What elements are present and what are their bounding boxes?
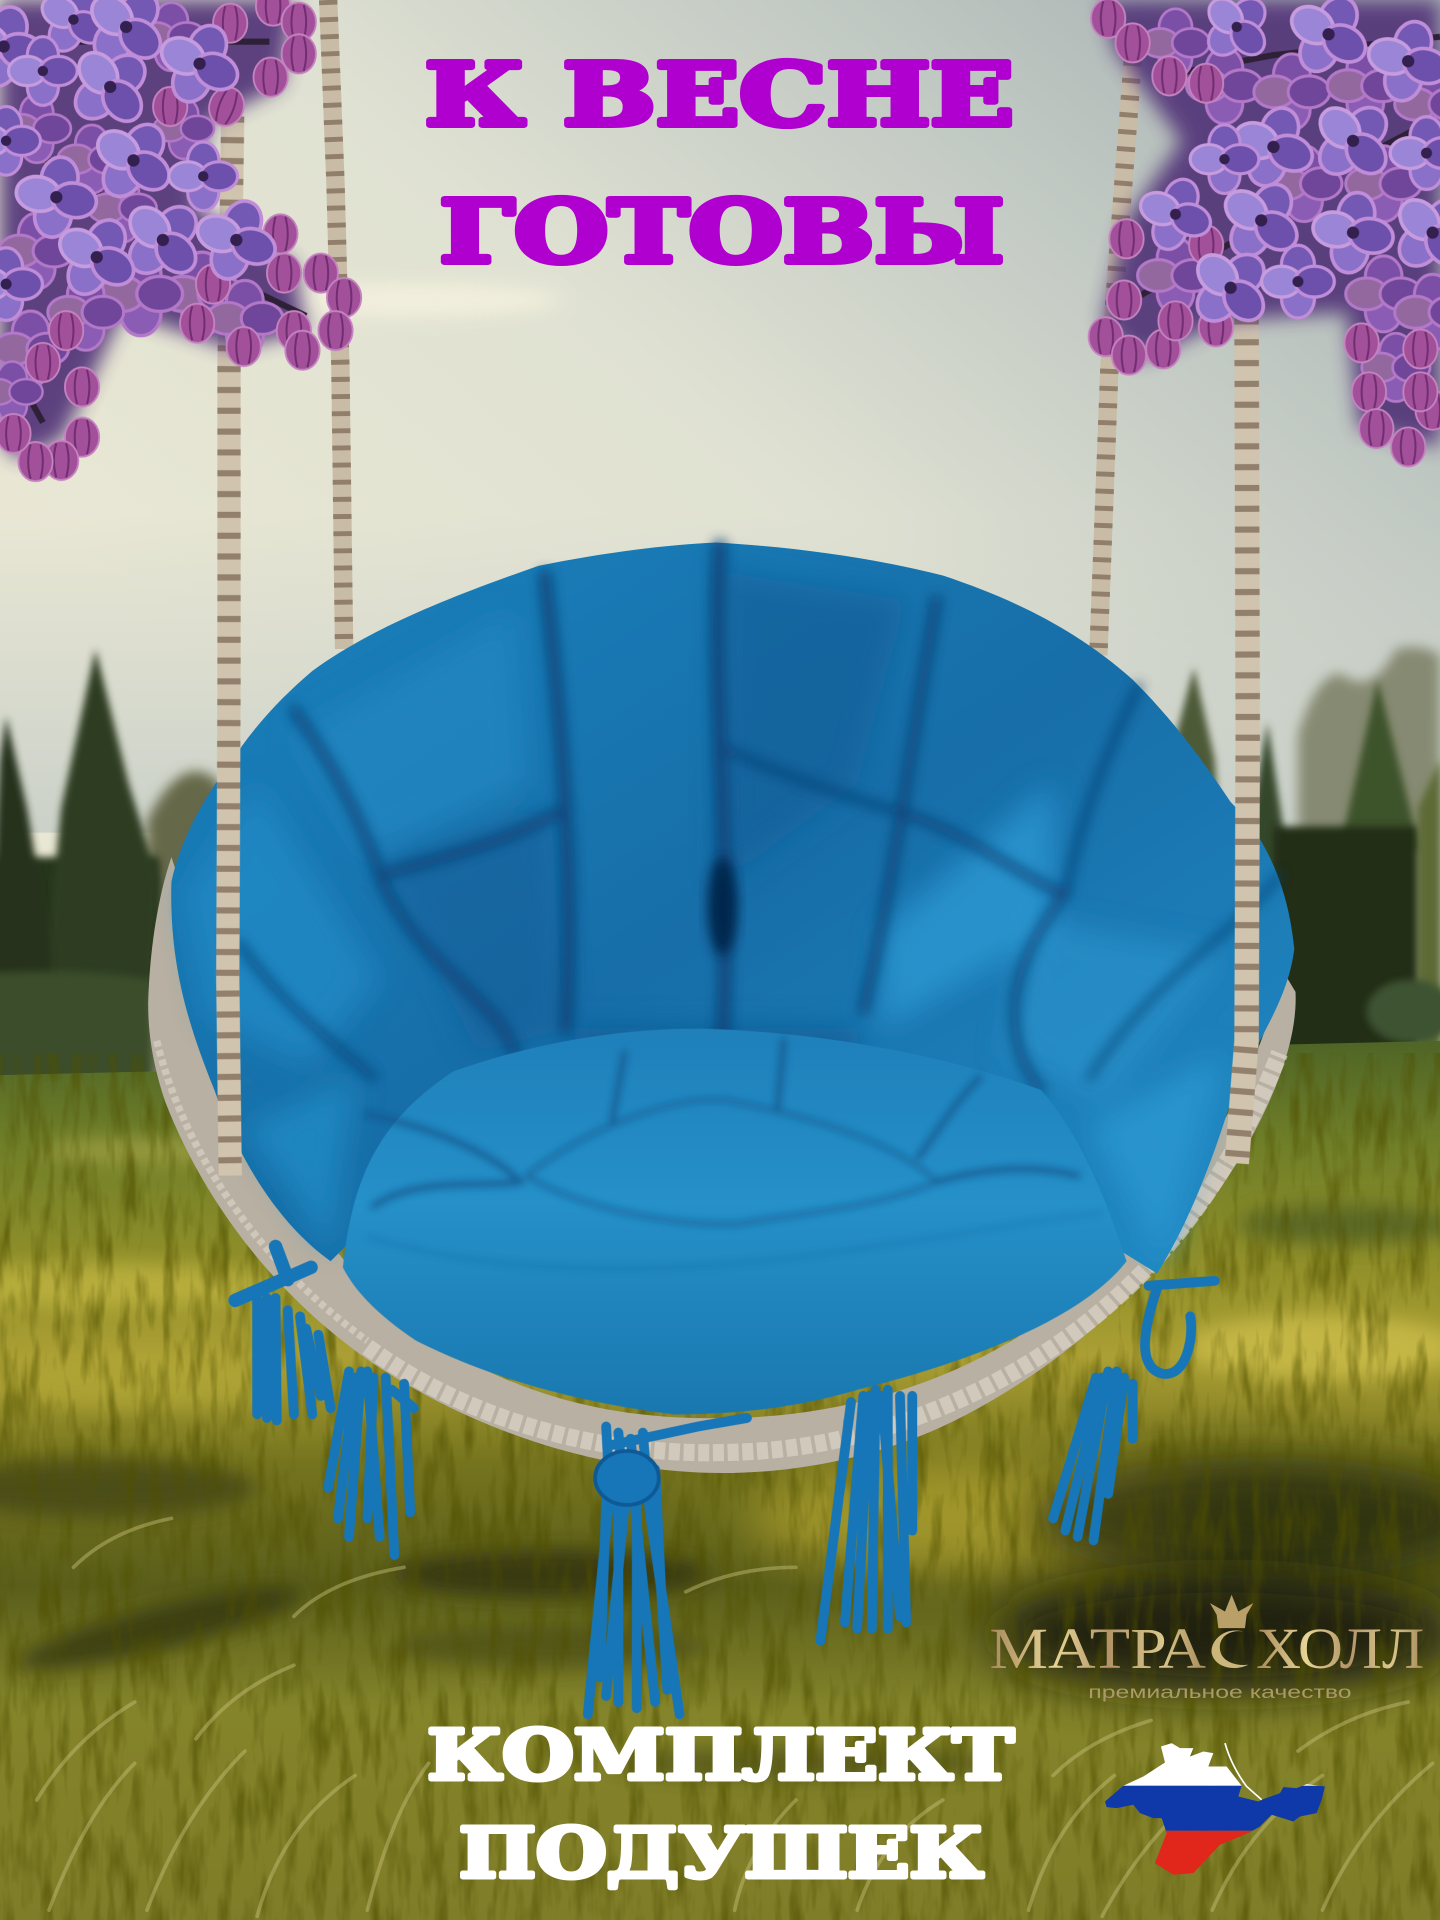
tassel: center [588,1418,747,1714]
brand logo: премиальное качество [1088,1682,1352,1702]
title [425,46,1014,283]
brand logo [989,1595,1424,1702]
tassel: left [328,1371,414,1555]
swing ring [148,857,1296,1473]
crown [1210,1595,1253,1628]
subtitle: ПОДУШЕК [459,1814,983,1894]
Crimea flag map [1100,1740,1330,1877]
title: К ВЕСНЕ [425,46,1014,146]
blue tassels and ties [235,1247,1215,1714]
treeline [0,647,1440,1084]
brand logo: МАТРА [989,1616,1206,1681]
near ropes [228,116,1248,1176]
brand logo: ХОЛЛ [1256,1616,1424,1681]
tassel: right center [820,1390,912,1641]
cushion back [171,542,1294,1273]
grass lawn [0,1041,1440,1920]
left bow [235,1247,311,1300]
crescent emblem [1212,1630,1248,1668]
lilac branch right [1089,0,1440,467]
tassel: right [1053,1371,1133,1540]
lilac branch left [0,0,361,481]
cushion shading [184,563,1224,1261]
title: ГОТОВЫ [440,183,1004,283]
subtitle [427,1716,1014,1894]
cushion tufting seams [239,546,1280,1090]
sky background [0,0,1440,1102]
subtitle: КОМПЛЕКТ [427,1716,1014,1796]
tassel: far left [257,1298,331,1420]
far ropes [328,0,1133,655]
right bow [1145,1281,1215,1374]
cushion seat [343,1029,1127,1414]
center knot [595,1451,659,1505]
